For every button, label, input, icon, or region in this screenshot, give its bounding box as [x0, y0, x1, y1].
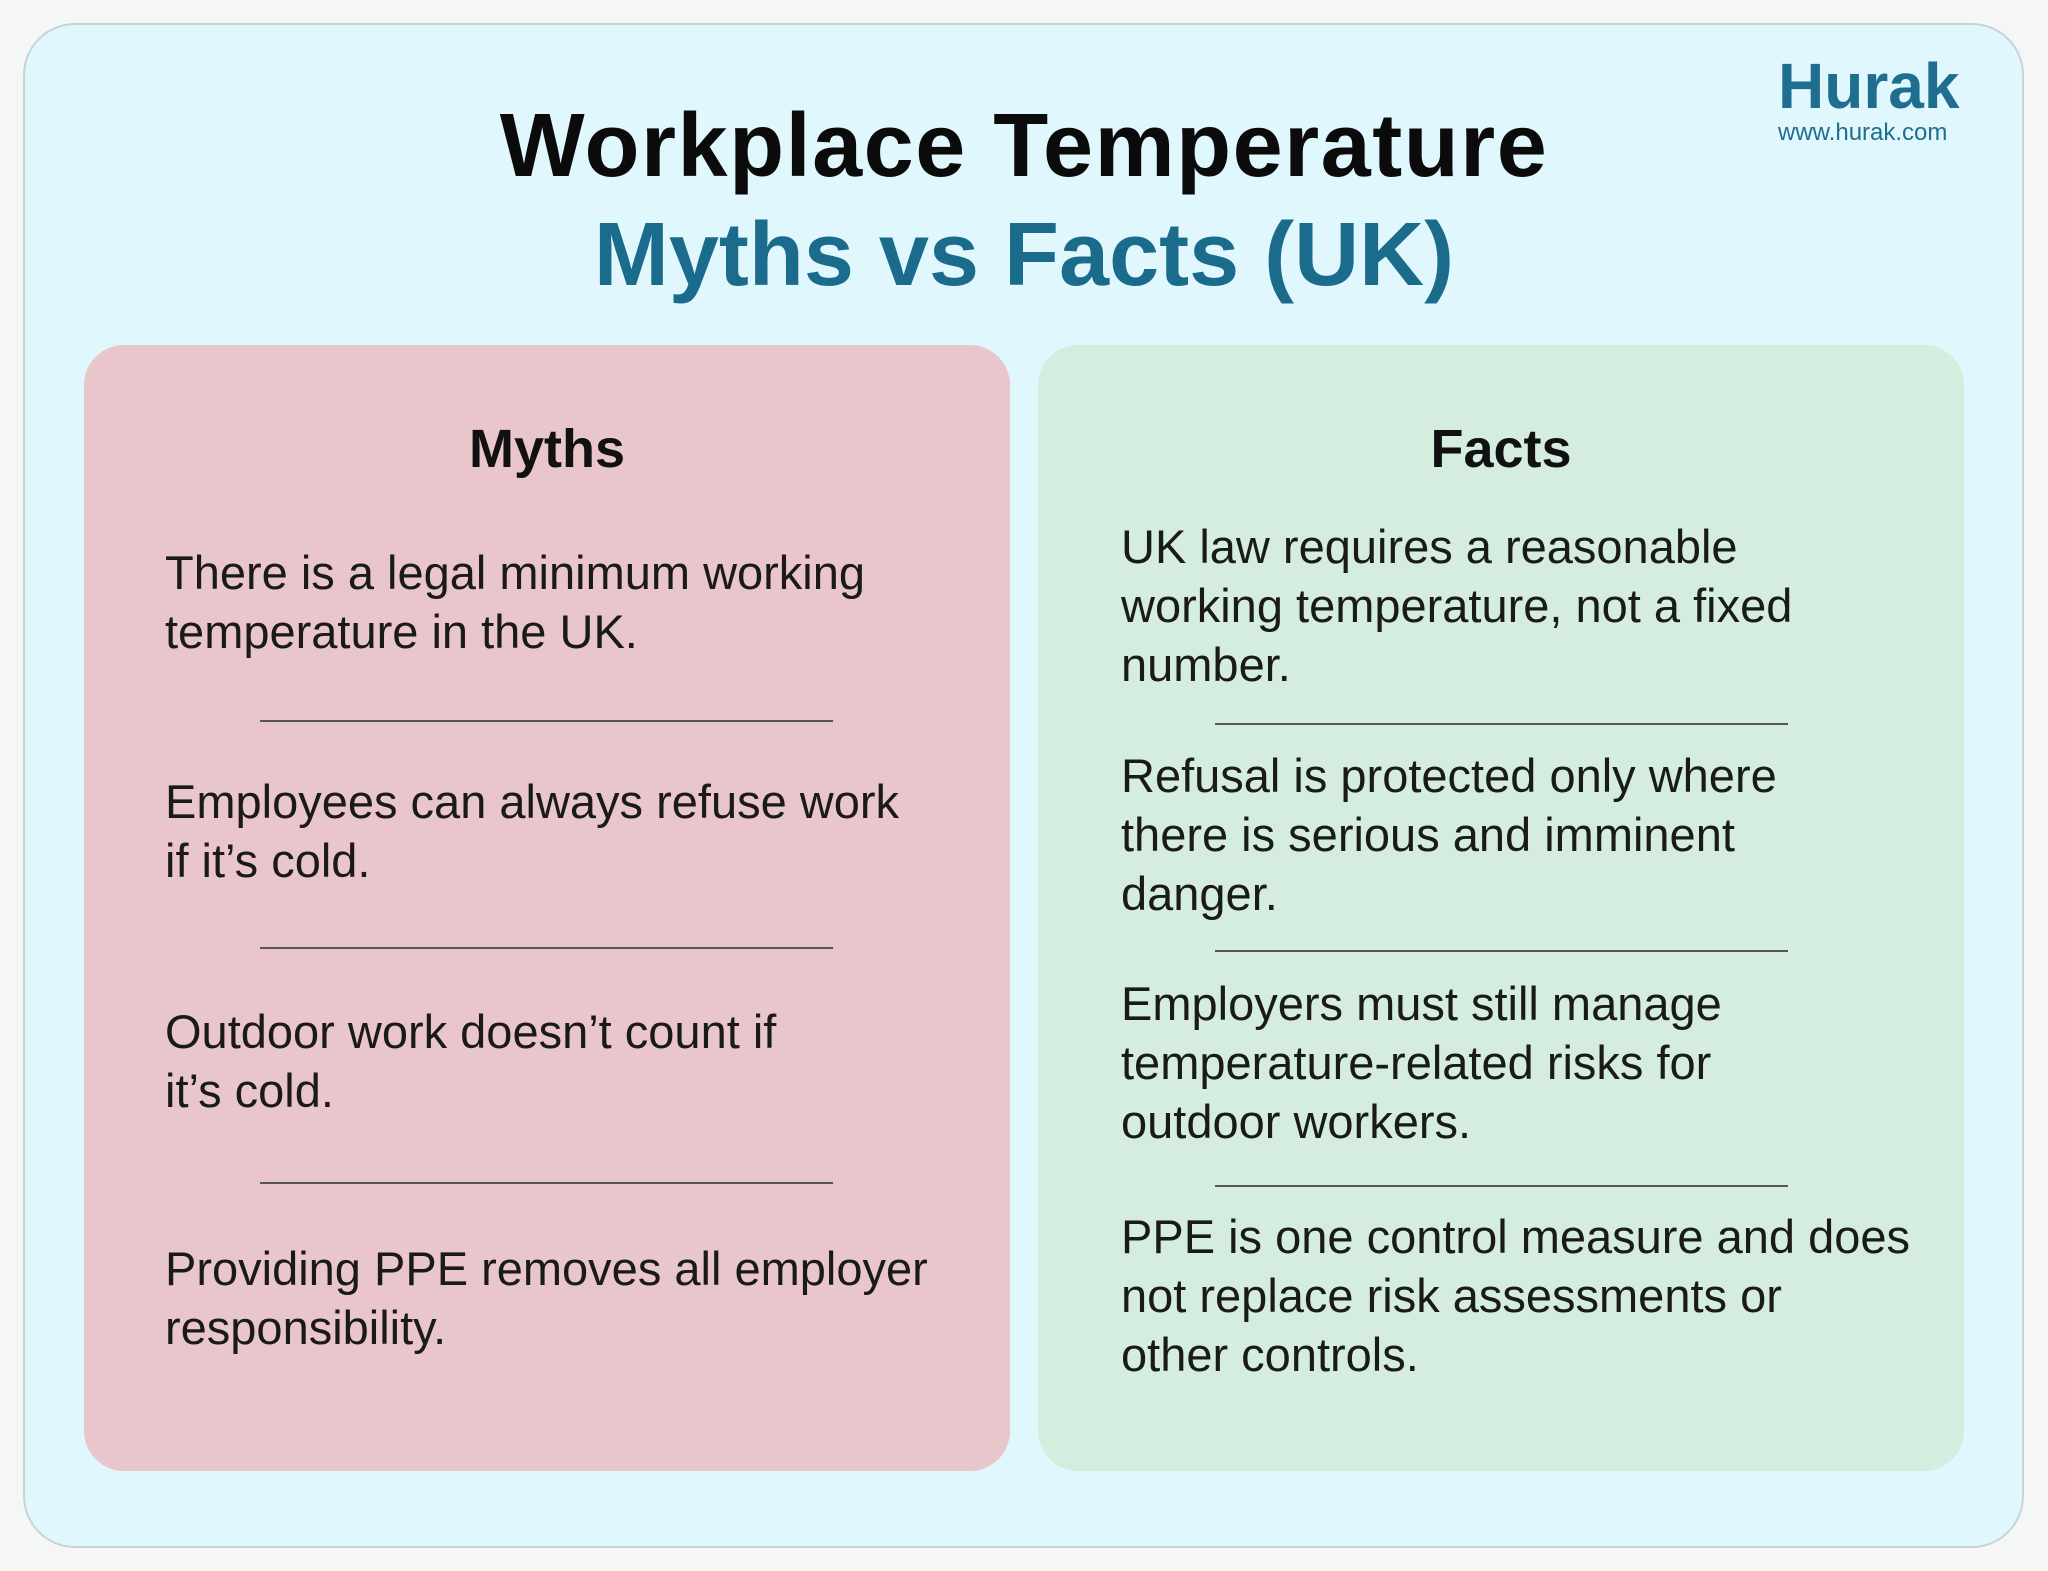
- fact 3: temperature-related risks for: [1121, 1036, 1711, 1089]
- heading: facts: Facts: [1430, 419, 1572, 479]
- fact 4: other controls.: [1121, 1328, 1419, 1381]
- myth 2: Employees can always refuse work: [165, 775, 899, 828]
- myth 3: Outdoor work doesn’t count if: [165, 1005, 776, 1058]
- fact 2: there is serious and imminent: [1121, 808, 1735, 861]
- myth 3: [165, 1005, 776, 1117]
- logo: www.hurak.com: [1778, 119, 1947, 146]
- fact 3: outdoor workers.: [1121, 1095, 1471, 1148]
- panel: facts: [1038, 345, 1964, 1471]
- myth 2: if it’s cold.: [165, 834, 370, 887]
- fact 3: [1121, 977, 1722, 1148]
- fact 4: not replace risk assessments or: [1121, 1269, 1782, 1322]
- myth 1: temperature in the UK.: [165, 605, 638, 658]
- myth 1: There is a legal minimum working: [165, 546, 865, 599]
- subtitle: Myths vs Facts (UK): [594, 205, 1454, 305]
- myth 3: it’s cold.: [165, 1064, 334, 1117]
- fact 2: danger.: [1121, 867, 1278, 920]
- fact 1: working temperature, not a fixed: [1121, 579, 1792, 632]
- myth 4: responsibility.: [165, 1301, 446, 1354]
- myth 2: [165, 775, 899, 887]
- fact 2: [1121, 749, 1777, 920]
- fact 3: Employers must still manage: [1121, 977, 1722, 1030]
- fact 2: Refusal is protected only where: [1121, 749, 1777, 802]
- fact 1: number.: [1121, 638, 1291, 691]
- myth 4: [165, 1242, 928, 1354]
- panel: myths: [84, 345, 1010, 1471]
- myth 4: Providing PPE removes all employer: [165, 1242, 928, 1295]
- fact 1: [1121, 520, 1792, 691]
- title: Workplace Temperature: [500, 96, 1548, 196]
- fact 1: UK law requires a reasonable: [1121, 520, 1738, 573]
- logo: Hurak: [1778, 50, 1959, 122]
- myth 1: [165, 546, 865, 658]
- heading: myths: Myths: [469, 419, 625, 479]
- fact 4: [1121, 1210, 1910, 1381]
- fact 4: PPE is one control measure and does: [1121, 1210, 1910, 1263]
